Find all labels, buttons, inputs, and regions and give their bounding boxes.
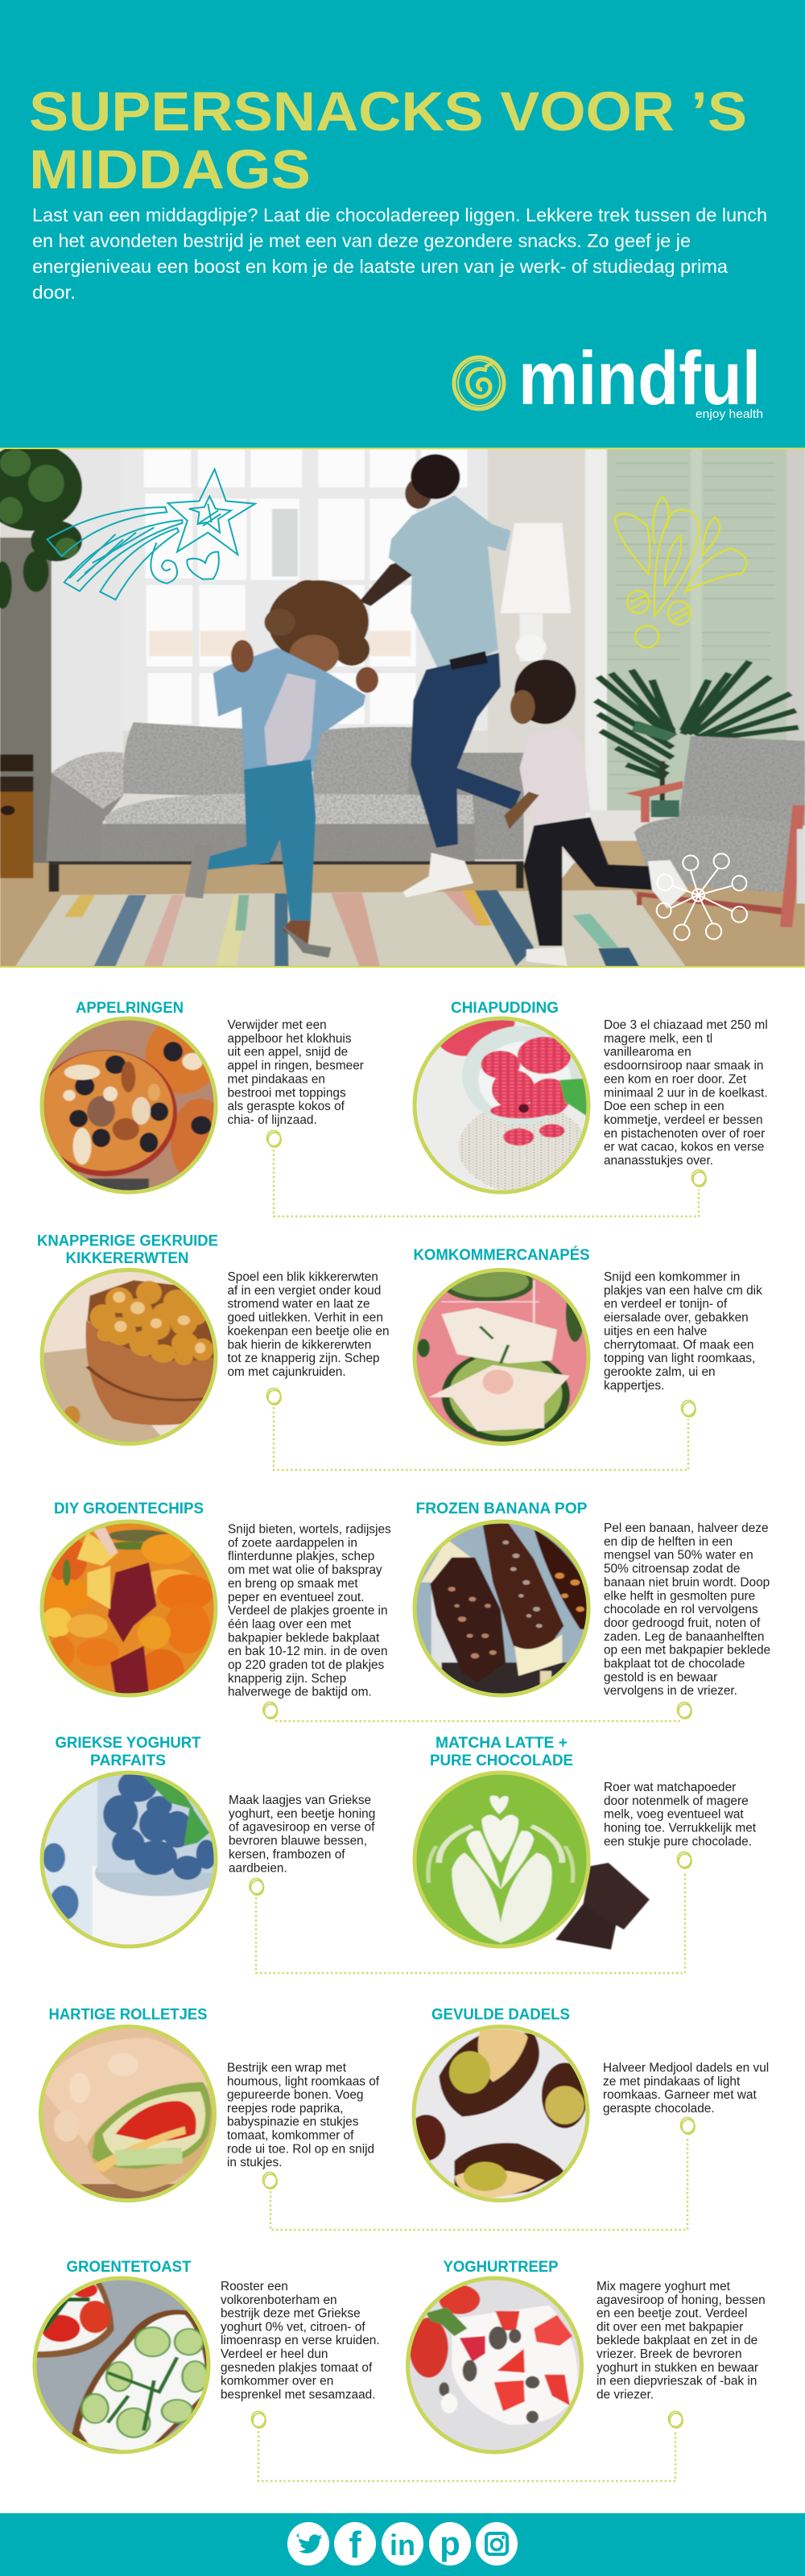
wall left and concrete column (52, 443, 123, 782)
photo: chia pudding (412, 1016, 591, 1195)
connector: row 1 (267, 1130, 706, 1216)
icon: linkedin: in (390, 2529, 415, 2562)
snack: Yoghurtreep (400, 2259, 766, 2458)
heading: YOGHURTREEP (443, 2259, 559, 2276)
description: Mix magere yoghurt met (597, 2280, 731, 2293)
description: in stukjes. (227, 2156, 282, 2169)
description: goed uitlekken. Verhit in een (227, 1311, 383, 1325)
photo: chocolate pieces (555, 1863, 650, 1950)
description: bakplaat tot de chocolade (604, 1657, 745, 1671)
icon: pinterest: p (440, 2524, 460, 2562)
heading: PURE CHOCOLADE (430, 1752, 573, 1769)
description: of agavesiroop en verse of (229, 1821, 375, 1835)
description: bestrooi met toppings (227, 1086, 346, 1100)
description: Verwijder met een (227, 1018, 327, 1032)
doodle: white network (657, 854, 747, 940)
snack: Groentetoast (26, 2259, 380, 2458)
photo: apple rings (40, 1016, 217, 1195)
photo: yoghurt parfait (40, 1771, 217, 1948)
description: komkommer over en (221, 2375, 333, 2388)
description: aardbeien. (229, 1861, 287, 1875)
description: vervolgens in de vriezer. (604, 1684, 737, 1698)
lamp (501, 523, 571, 613)
photo: vegetable toast (32, 2277, 211, 2454)
plant top left (0, 443, 82, 609)
photo: stuffed dates (412, 2025, 589, 2202)
description: bakpapier beklede bakplaat (228, 1631, 380, 1645)
description: tot ze knapperig zijn. Schep (227, 1352, 380, 1365)
icon: twitter (287, 2522, 329, 2566)
description: ananasstukjes over. (604, 1154, 713, 1167)
description: minimaal 2 uur in de koelkast. (604, 1086, 768, 1100)
snack: Knapperige gekruide kikkererwten (31, 1233, 390, 1450)
description: gesneden plakjes tomaat of (221, 2361, 373, 2375)
connector: row 3 (263, 1702, 691, 1721)
description: en dip de helften in een (604, 1535, 733, 1549)
description: beklede bakplaat en zet in de (597, 2334, 758, 2347)
snack: Hartige rolletjes (31, 2006, 380, 2207)
palm (596, 661, 799, 778)
heading: MATCHA LATTE + (436, 1735, 568, 1752)
heading: GEVULDE DADELS (431, 2006, 570, 2024)
description: Rooster een (221, 2280, 288, 2293)
description: Doe een schep in een (604, 1100, 724, 1113)
snack: Chiapudding (406, 1000, 768, 1200)
description: Maak laagjes van Griekse (229, 1794, 371, 1807)
doodle: shooting star (47, 469, 255, 600)
description: chia- of lijnzaad. (227, 1113, 317, 1127)
description: vriezer. Breek de bevroren (597, 2347, 742, 2361)
heading (37, 1233, 218, 1267)
description: houmous, light roomkaas of (227, 2074, 380, 2088)
description: yoghurt, een beetje honing (229, 1807, 375, 1821)
doodle: yellow splash (615, 497, 746, 647)
description: een kom en roer door. Zet (604, 1072, 747, 1086)
description: bestrijk deze met Griekse (221, 2307, 361, 2321)
description: topping van light roomkaas, (604, 1352, 755, 1365)
description: flinterdunne plakjes, schep (228, 1550, 374, 1563)
heading: FROZEN BANANA POP (415, 1501, 588, 1517)
description: gerookte zalm, ui en (604, 1365, 716, 1379)
heading: KIKKERERWTEN (66, 1250, 188, 1267)
description: en verdeel er tonijn- of (604, 1298, 728, 1311)
title: MIDDAGS (29, 138, 311, 200)
heading (55, 1735, 201, 1769)
icon: instagram (476, 2522, 518, 2566)
rug (15, 890, 685, 966)
description: om met cajunkruiden. (227, 1365, 346, 1379)
description: honing toe. Verrukkelijk met (604, 1822, 757, 1835)
description: cherrytomaat. Of maak een (604, 1338, 753, 1352)
intro text: en het avondeten bestrijd je met een van deze gezondere snacks. Zo geef je je (32, 230, 691, 251)
description: en bak 10-12 min. in de oven (228, 1645, 388, 1658)
photo: matcha latte (412, 1771, 591, 1948)
description: gepureerde bonen. Voeg (227, 2088, 363, 2102)
description: Spoel een blik kikkererwten (227, 1270, 378, 1284)
description: de vriezer. (597, 2388, 654, 2401)
description: één laag over een met (228, 1617, 352, 1631)
description: babyspinazie en stukjes (227, 2116, 359, 2129)
description: en een beetje zout. Verdeel (597, 2307, 747, 2321)
connector: row 2 (267, 1388, 696, 1470)
description: en breng op smaak met (228, 1577, 358, 1591)
heading: CHIAPUDDING (451, 1000, 559, 1017)
description: chocolade en rol vervolgens (604, 1603, 758, 1616)
snack: Komkommercanapés (406, 1246, 762, 1450)
description: magere melk, een tl (604, 1032, 712, 1046)
heading: GRIEKSE YOGHURT (55, 1735, 201, 1752)
description: vanillearoma en (604, 1046, 691, 1059)
heading: GROENTETOAST (66, 2259, 192, 2276)
heading: KNAPPERIGE GEKRUIDE (37, 1233, 218, 1249)
intro text: Last van een middagdipje? Laat die chocoladereep liggen. Lekkere trek tussen de lunch (32, 204, 767, 225)
sofa (46, 722, 524, 861)
description: limoenrasp en verse kruiden. (221, 2334, 380, 2347)
description: kersen, frambozen of (229, 1847, 345, 1861)
description: yoghurt in stukken en bewaar (597, 2361, 758, 2375)
description: zaden. Leg de banaanhelften (604, 1630, 764, 1644)
description: bevroren blauwe bessen, (229, 1835, 367, 1848)
icon: swirl apple (454, 357, 504, 409)
connector: row 4 (250, 1852, 691, 1973)
snack: DIY groentechips (31, 1501, 391, 1703)
description: Halveer Medjool dadels en vul (603, 2061, 769, 2075)
window (121, 443, 488, 731)
description: als geraspte kokos of (227, 1100, 345, 1113)
description: halverwege de baktijd om. (228, 1686, 372, 1699)
description: volkorenboterham en (221, 2293, 337, 2307)
description: banaan niet bruin wordt. Doop (604, 1575, 770, 1589)
boy (504, 659, 688, 966)
description: uitjes en een halve (604, 1324, 707, 1338)
icon: facebook (334, 2522, 376, 2566)
description: er wat cacao, kokos en verse (604, 1141, 764, 1154)
description: kappertjes. (604, 1379, 664, 1393)
description: door gedroogd fruit, noten of (604, 1616, 761, 1630)
icon: linkedin (382, 2522, 423, 2566)
footer panel (0, 2513, 805, 2576)
intro text (32, 204, 767, 303)
father (359, 454, 574, 898)
description: yoghurt 0% vet, citroen- of (221, 2320, 365, 2334)
intro text: energieniveau een boost en kom je de laatste uren van je werk- of studiedag prima (32, 256, 728, 277)
description: af in een vergiet onder koud (227, 1284, 381, 1298)
icon: pinterest (429, 2522, 471, 2566)
snack: Griekse yoghurt parfaits (31, 1735, 375, 1956)
description: besprenkel met sesamzaad. (221, 2388, 375, 2401)
description: bak hierin de kikkererwten (227, 1338, 371, 1352)
snack: Gevulde dadels (406, 2006, 769, 2207)
photo: frozen yoghurt bark (406, 2277, 584, 2454)
photo: frozen banana (412, 1520, 591, 1697)
header panel (0, 0, 805, 449)
heading: APPELRINGEN (76, 1000, 184, 1017)
green shutters (607, 449, 786, 811)
description: gestold is en bewaar (604, 1670, 717, 1684)
description: dit over een met bakpapier (597, 2320, 743, 2334)
description: kommetje, verdeel er bessen (604, 1113, 763, 1127)
connector: row 6 (251, 2412, 683, 2481)
description: plakjes van een halve cm dik (604, 1284, 762, 1298)
description: peper en eventueel zout. (228, 1591, 364, 1604)
description: door notenmelk of magere (604, 1794, 749, 1808)
photo: savoury wraps (39, 2025, 217, 2202)
description: geraspte chocolade. (603, 2102, 715, 2116)
description: mengsel van 50% water en (604, 1549, 753, 1563)
heading: KOMKOMMERCANAPÉS (414, 1246, 589, 1264)
heading: DIY GROENTECHIPS (54, 1501, 204, 1517)
cabinet left (0, 754, 33, 771)
snack: Appelringen (31, 1000, 364, 1200)
description: Bestrijk een wrap met (227, 2061, 347, 2075)
description: 50% citroensap zodat de (604, 1563, 740, 1576)
description: Roer wat matchapoeder (604, 1781, 736, 1794)
heading: PARFAITS (90, 1752, 166, 1769)
description: appel in ringen, besmeer (227, 1059, 364, 1073)
heading: HARTIGE ROLLETJES (48, 2006, 208, 2024)
snack: Frozen banana pop (406, 1501, 770, 1703)
wall right (488, 443, 585, 815)
heading (430, 1735, 573, 1769)
description: en pistachenoten over of roer (604, 1127, 765, 1141)
description: op 220 graden tot de plakjes (228, 1658, 385, 1672)
description: tomaat, komkommer of (227, 2128, 354, 2143)
description: eiersalade over, gebakken (604, 1311, 749, 1325)
description: melk, voeg eventueel wat (604, 1808, 744, 1822)
description: Pel een banaan, halveer deze (604, 1521, 769, 1535)
logo: mindful: enjoy health (696, 407, 763, 421)
description: roomkaas. Garneer met wat (603, 2088, 757, 2102)
armchair (625, 736, 805, 927)
description: op een met bakpapier beklede (604, 1644, 770, 1657)
description: reepjes rode paprika, (227, 2102, 344, 2116)
description: rode ui toe. Rol op en snijd (227, 2142, 374, 2156)
description: uit een appel, snijd de (227, 1046, 348, 1059)
description: in een diepvrieszak of -bak in (597, 2375, 757, 2388)
description: Snijd een komkommer in (604, 1270, 740, 1284)
description: koekenpan een beetje olie en (227, 1324, 390, 1338)
description: met pindakaas en (227, 1072, 325, 1086)
description: om met wat olie of bakspray (228, 1563, 382, 1577)
description: elke helft in gesmolten pure (604, 1589, 755, 1603)
intro text: door. (32, 282, 76, 303)
photo: vegetable chips (40, 1520, 217, 1697)
logo: mindful: mindful (518, 336, 761, 420)
description: ze met pindakaas of light (603, 2074, 741, 2088)
photo: chickpeas (40, 1268, 217, 1446)
description: Verdeel er heel dun (221, 2347, 328, 2361)
title (29, 80, 747, 200)
title: SUPERSNACKS VOOR ’S (29, 80, 747, 142)
icon: facebook: f (349, 2524, 361, 2566)
connector: row 5 (262, 2117, 695, 2230)
floor (0, 863, 805, 975)
description: Verdeel de plakjes groente in (228, 1604, 388, 1618)
description: een stukje pure chocolade. (604, 1835, 752, 1848)
girl (185, 580, 378, 958)
description: agavesiroop of honing, bessen (597, 2293, 766, 2307)
description: appelboor het klokhuis (227, 1032, 352, 1046)
snack: Matcha latte + pure chocolade (406, 1735, 757, 1956)
description: knapperig zijn. Schep (228, 1672, 346, 1686)
photo: cucumber canapes (412, 1268, 591, 1446)
hero photo: family dancing (0, 443, 805, 975)
description: of zoete aardappelen in (228, 1536, 357, 1550)
description: Doe 3 el chiazaad met 250 ml (604, 1018, 768, 1032)
description: stromend water en laat ze (227, 1298, 370, 1311)
description: Snijd bieten, wortels, radijsjes (228, 1523, 391, 1536)
description: esdoornsiroop naar smaak in (604, 1059, 763, 1073)
